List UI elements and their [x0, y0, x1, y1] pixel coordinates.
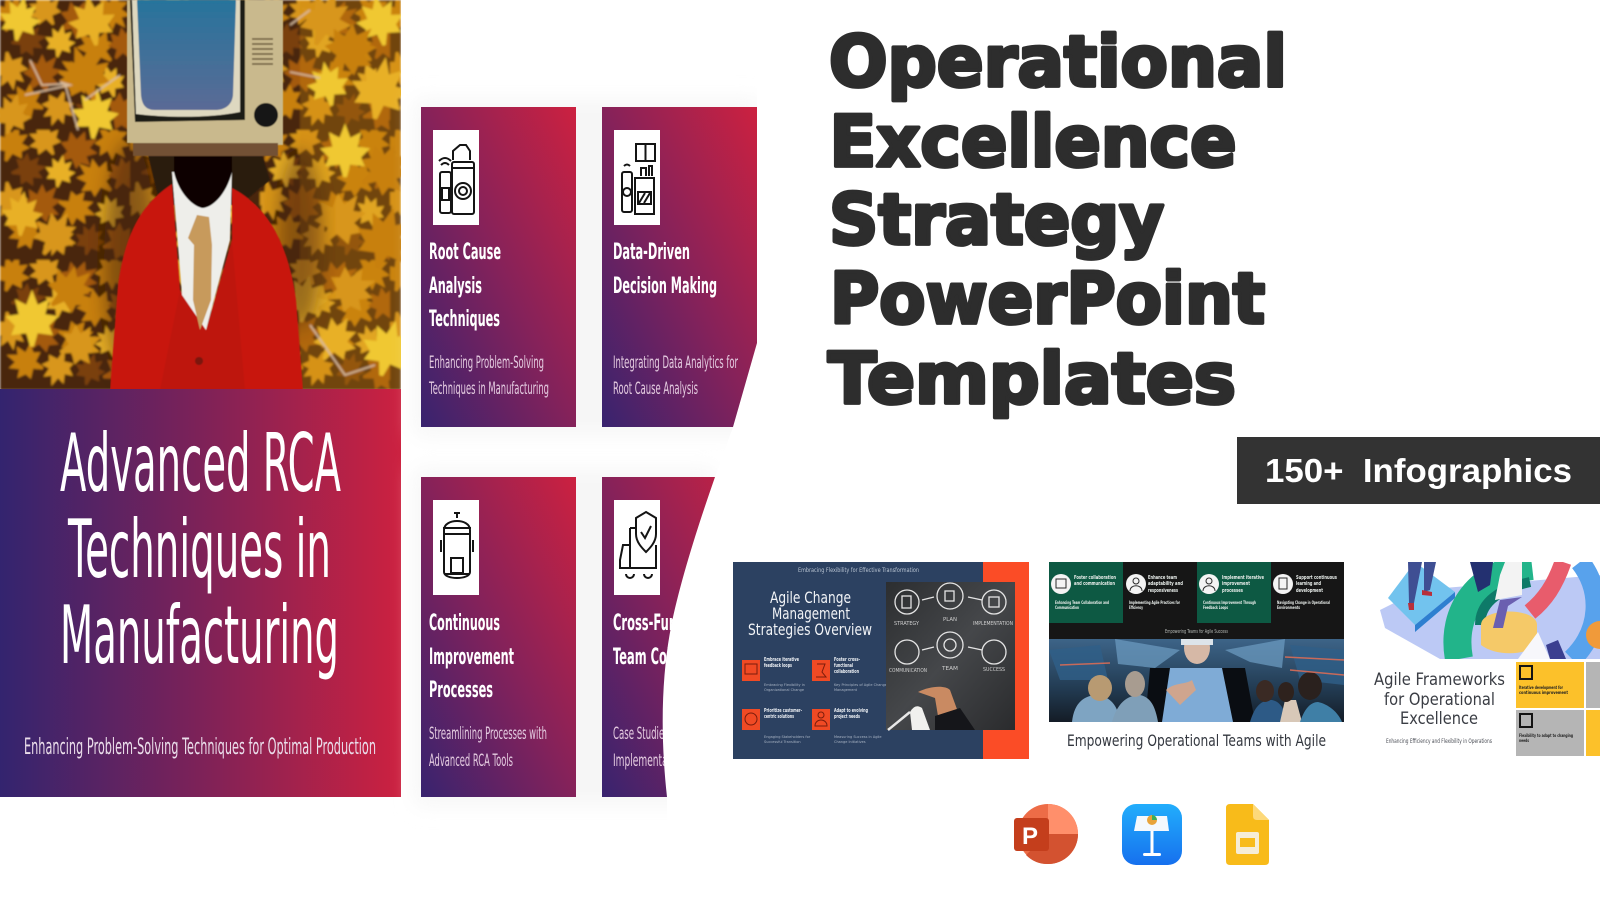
main title: Excellence — [830, 101, 1236, 183]
card description: Enhancing Problem-Solving — [429, 353, 544, 373]
main title — [828, 21, 1287, 420]
thumbnail cell labels: processes — [1222, 588, 1243, 594]
thumbnail cell labels: Navigating Change in Operational — [1277, 600, 1330, 605]
thumbnail: Agile Change Management Strategies Overview — [733, 562, 1029, 759]
thumbnail item notes: Engaging Stakeholders for — [764, 735, 811, 739]
speaker grille — [252, 39, 273, 64]
card heading: Root Cause — [429, 240, 501, 265]
panel: presentation title: Advanced RCA — [60, 417, 341, 510]
card heading: Team Collaboration — [613, 645, 737, 670]
thumbnail heading: for Operational — [1384, 690, 1495, 709]
icon: rice cooker — [433, 500, 479, 595]
chalkboard photo: PLAN — [943, 617, 957, 623]
yellow and grey tiles: needs — [1519, 738, 1529, 744]
thumbnail cell labels: Support continuous — [1296, 575, 1337, 581]
heading: Advanced RCA Techniques in Manufacturing: Techniques in — [68, 503, 331, 596]
panel: presentation title: Manufacturing — [60, 589, 339, 682]
chalkboard photo: TEAM — [941, 666, 958, 672]
heading: Advanced RCA Techniques in Manufacturing — [60, 417, 341, 682]
thumbnail cell labels: Enhance team — [1148, 575, 1177, 581]
badge: 150+ Infographics — [1237, 437, 1600, 504]
yellow and grey tiles: continuous improvement — [1519, 690, 1569, 696]
card heading: Continuous — [429, 611, 500, 636]
card description — [429, 724, 547, 771]
card heading: Cross-Functional — [613, 611, 721, 636]
knob — [254, 103, 278, 127]
thumbnail: Empowering Operational Teams with Agile: Empowering Teams for Agile Success — [1165, 629, 1228, 635]
television base — [133, 143, 278, 156]
card heading — [429, 240, 501, 332]
thumbnail item notes: Embracing Flexibility in — [764, 683, 805, 687]
thumbnail icon details — [1056, 578, 1287, 591]
card heading: Decision Making — [613, 274, 717, 299]
thumbnail icon tiles — [742, 660, 830, 730]
card heading: Improvement — [429, 645, 514, 670]
thumbnail subtitle: Enhancing Efficiency and Flexibility in Operations — [1386, 738, 1492, 745]
thumbnail heading: Management — [772, 604, 850, 623]
card: Data-Driven Decision Making: Integrating Data Analytics for — [613, 353, 738, 373]
thumbnail cell labels: development — [1296, 588, 1323, 594]
thumbnail cell labels: Foster collaboration — [1074, 575, 1116, 581]
card heading — [613, 611, 737, 670]
icon: smart kitchen — [614, 130, 660, 225]
tie — [188, 215, 212, 330]
thumbnail item notes: Change Initiatives — [834, 740, 866, 744]
thumbnail item notes: Successful Transition — [764, 740, 801, 744]
card: Root Cause Analysis Techniques: Techniques in Manufacturing — [429, 379, 549, 399]
card: Data-Driven Decision Making — [602, 107, 757, 427]
icon: PowerPoint — [1014, 804, 1078, 864]
thumbnail cell labels: Continuous Improvement Through — [1203, 600, 1256, 605]
icon: PowerPoint: P — [1022, 823, 1038, 850]
main title: Templates — [828, 338, 1236, 420]
card description — [429, 353, 549, 399]
card heading — [429, 611, 514, 703]
card: Cross-Functional Team Collaboration — [602, 477, 757, 797]
chalkboard photo: STRATEGY — [894, 621, 920, 627]
main title: Strategy — [829, 179, 1164, 261]
thumbnail: Empowering Operational Teams with Agile — [1049, 562, 1344, 750]
card shadow halo — [415, 100, 760, 805]
thumbnail item labels: project needs — [834, 714, 860, 720]
icon: Keynote — [1122, 804, 1182, 865]
thumbnail: Agile Change Management Strategies Overview: Embracing Flexibility for Effective Transformation — [798, 566, 919, 574]
card description — [613, 724, 728, 771]
subtitle: Enhancing Problem-Solving Techniques for Optimal Production — [24, 735, 376, 760]
thumbnail cell labels — [1055, 575, 1337, 610]
thumbnail cell labels: Feedback Loops — [1203, 605, 1228, 610]
thumbnail cell labels: Efficiency — [1129, 605, 1143, 610]
thumbnail heading: Strategies Overview — [748, 620, 872, 639]
thumbnail item labels: Embrace iterative — [764, 657, 799, 663]
thumbnail heading — [748, 588, 872, 639]
screen bezel — [130, 0, 245, 122]
thumbnail item labels: collaboration — [834, 669, 859, 675]
chalkboard photo: COMMUNICATION — [889, 668, 927, 674]
thumbnail item labels — [764, 657, 868, 720]
chalkboard photo: SUCCESS — [983, 667, 1005, 673]
card heading: Processes — [429, 678, 493, 703]
thumbnail cell labels: Environments — [1277, 605, 1300, 610]
thumbnail cell labels: adaptability and — [1148, 581, 1183, 587]
thumbnail item notes: Key Principles of Agile Change — [834, 683, 887, 687]
thumbnail item labels: feedback loops — [764, 663, 792, 669]
thumbnail cell labels: improvement — [1222, 581, 1250, 587]
card heading: Data-Driven — [613, 240, 690, 265]
thumbnail item labels: centric solutions — [764, 714, 794, 720]
thumbnail heading: Agile Change — [770, 588, 851, 607]
dark hair behind head — [148, 155, 270, 205]
chalkboard photo: IMPLEMENTATION — [973, 621, 1013, 627]
card heading — [613, 240, 717, 299]
thumbnail cell labels: Implementing Agile Practices for — [1129, 600, 1180, 605]
icon: Google Slides — [1226, 804, 1269, 865]
thumbnail cell labels: Enhancing Team Collaboration and — [1055, 600, 1109, 605]
white shirt collar — [172, 168, 232, 330]
chalkboard photo — [886, 582, 1015, 730]
yellow and grey tiles — [1516, 662, 1600, 756]
card: Continuous Improvement Processes — [421, 477, 576, 797]
thumbnail heading: Agile Frameworks — [1374, 670, 1505, 689]
team photo — [1049, 632, 1344, 722]
isometric illustration — [1380, 562, 1600, 659]
icon: delivery truck with shield — [614, 500, 660, 595]
card heading: Techniques — [429, 307, 500, 332]
card description: Advanced RCA Tools — [429, 751, 513, 771]
thumbnail item labels: Foster cross- — [834, 657, 860, 663]
main title: Operational — [829, 21, 1287, 103]
white curved overlay — [663, 0, 1600, 900]
yellow and grey tiles: Iterative development for — [1519, 685, 1564, 691]
cardigan button — [195, 357, 203, 365]
card description: Root Cause Analysis — [613, 379, 698, 399]
thumbnail cell labels: learning and — [1296, 581, 1321, 587]
thumbnail heading: Excellence — [1400, 709, 1478, 728]
thumbnail: Agile Frameworks for Operational Excellence — [1374, 562, 1600, 756]
thumbnail caption: Empowering Operational Teams with Agile — [1067, 731, 1326, 750]
black neck — [174, 155, 232, 208]
card description: Case Studies of Successful — [613, 724, 728, 744]
thumbnail item notes: Organizational Change — [764, 688, 804, 692]
yellow and grey tiles: Flexibility to adapt to changing — [1519, 733, 1573, 739]
thumbnail item labels: Prioritize customer- — [764, 708, 802, 714]
television screen — [137, 0, 236, 110]
thumbnail cell labels: responsiveness — [1148, 588, 1178, 594]
thumbnail cell labels: Communication — [1055, 605, 1079, 610]
thumbnail cell labels: and communication — [1074, 581, 1115, 587]
thumbnail heading — [1374, 670, 1505, 728]
card: Continuous Improvement Processes: Streamlining Processes with — [429, 724, 547, 744]
thumbnail item notes — [764, 683, 887, 744]
red cardigan — [110, 184, 303, 390]
thumbnail icons — [1051, 574, 1293, 594]
thumbnail item labels: functional — [834, 663, 853, 669]
card: Root Cause Analysis Techniques — [421, 107, 576, 427]
card description: Implementation — [613, 751, 685, 771]
main title: PowerPoint — [830, 258, 1265, 340]
thumbnail item notes: Management — [834, 688, 858, 692]
card description — [613, 353, 738, 399]
television body — [127, 0, 283, 145]
thumbnail tile glyphs — [745, 664, 827, 726]
panel: presentation title — [0, 389, 401, 797]
thumbnail item notes: Measuring Success in Agile — [834, 735, 882, 739]
badge: 150+ Infographics: 150+ Infographics — [1265, 452, 1572, 489]
icon: smart washing machine — [433, 130, 479, 225]
thumbnail item labels: Adapt to evolving — [834, 708, 868, 714]
thumbnail cell labels: Implement iterative — [1222, 575, 1264, 581]
card heading: Analysis — [429, 274, 482, 299]
photo: man with television head in autumn leaves — [0, 0, 425, 390]
